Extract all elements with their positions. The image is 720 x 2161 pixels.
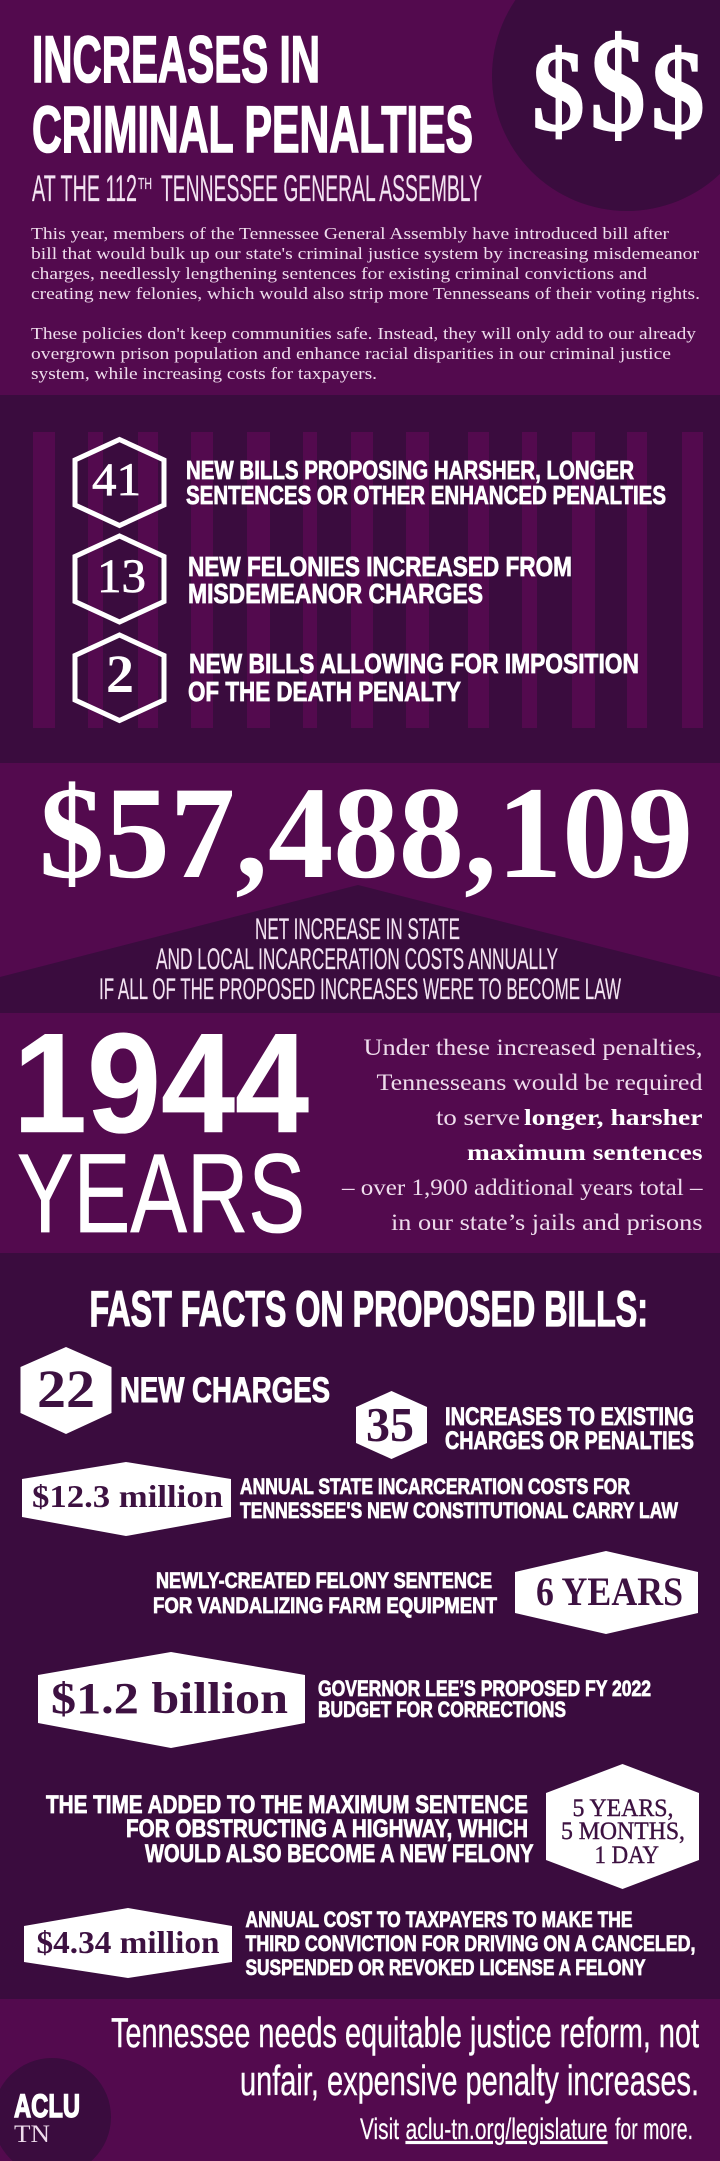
fact: 6 years xyxy=(153,1551,698,1634)
panel: footer xyxy=(0,2009,699,2161)
explanation text: Tennesseans would be required xyxy=(376,1070,703,1095)
logo: ACLU TN: ACLU xyxy=(14,2088,80,2124)
panel: header xyxy=(31,0,720,383)
title: CRIMINAL PENALTIES xyxy=(32,92,473,166)
fact: 5 years, 5 months, 1 day: THE TIME ADDED TO THE MAXIMUM SENTENCE xyxy=(46,1791,528,1819)
fact: $12.3 million: $12.3 million xyxy=(32,1478,223,1514)
cost caption: NET INCREASE IN STATE xyxy=(255,913,460,946)
stat: 13 new felonies: MISDEMEANOR CHARGES xyxy=(188,578,483,609)
intro paragraph 2: system, while increasing costs for taxpayers. xyxy=(31,364,377,383)
explanation text: Under these increased penalties, xyxy=(364,1035,702,1060)
explanation text: longer, harsher xyxy=(524,1105,702,1130)
subtitle xyxy=(32,168,482,209)
intro paragraph 1: bill that would bulk up our state's criminal justice system by increasing misdemeanor xyxy=(31,244,699,263)
stat: 13 new felonies: NEW FELONIES INCREASED FROM xyxy=(188,551,572,582)
stat: 41 new bills: 41 xyxy=(92,454,141,506)
intro paragraph 1: creating new felonies, which would also strip more Tennesseans of their voting rights. xyxy=(31,284,700,303)
fact: 22 new charges xyxy=(20,1347,330,1434)
logo: ACLU TN: TN xyxy=(14,2121,50,2148)
intro paragraph 1 xyxy=(31,224,700,303)
stat: 2 death penalty bills: 2 xyxy=(106,644,134,704)
intro paragraph 2 xyxy=(31,324,697,383)
closing statement xyxy=(111,2009,699,2104)
fact: $4.34 million: ANNUAL COST TO TAXPAYERS TO MAKE THE xyxy=(246,1907,632,1932)
panel: bill counts xyxy=(0,395,720,763)
fact: 22 new charges: NEW CHARGES xyxy=(120,1371,330,1410)
fact: 6 years: 6 YEARS xyxy=(536,1569,683,1614)
dark circle behind dollar signs xyxy=(492,0,720,211)
fact: 22 new charges: 22 xyxy=(37,1359,95,1419)
subtitle: AT THE 112 xyxy=(32,168,137,209)
explanation text: – over 1,900 additional years total – xyxy=(341,1175,703,1200)
title: INCREASES IN xyxy=(32,22,320,96)
panel: 1944 years xyxy=(13,1004,703,1256)
fact: 5 years, 5 months, 1 day: WOULD ALSO BECOME A NEW FELONY xyxy=(145,1840,534,1868)
fact: $1.2 billion: $1.2 billion xyxy=(51,1674,288,1723)
intro paragraph 1: charges, needlessly lengthening sentences for existing criminal convictions and xyxy=(31,264,648,283)
explanation text xyxy=(341,1035,703,1235)
fact: $12.3 million: ANNUAL STATE INCARCERATION COSTS FOR xyxy=(240,1474,630,1499)
explanation text: to serve xyxy=(436,1105,520,1130)
dark roof shape xyxy=(0,885,720,1013)
intro paragraph 2: overgrown prison population and enhance racial disparities in our criminal justice xyxy=(31,344,671,363)
big number: $57,488,109 xyxy=(39,759,693,906)
stat: 41 new bills xyxy=(75,440,666,526)
icon: dollar signs: $ xyxy=(532,27,585,156)
explanation text: maximum sentences xyxy=(467,1140,703,1165)
fact: $12.3 million xyxy=(22,1462,678,1536)
big figure xyxy=(13,1004,309,1256)
call to action: aclu-tn.org/legislature xyxy=(406,2113,608,2146)
panel: net cost xyxy=(0,759,720,1013)
fact: 6 years: FOR VANDALIZING FARM EQUIPMENT xyxy=(153,1593,497,1618)
cost caption xyxy=(99,913,621,1006)
big figure: 1944 xyxy=(13,1004,309,1163)
fact: $4.34 million: $4.34 million xyxy=(36,1924,220,1960)
fact: 6 years: NEWLY-CREATED FELONY SENTENCE xyxy=(156,1568,492,1593)
fact: $4.34 million xyxy=(24,1907,696,1980)
icon: dollar signs xyxy=(532,10,705,160)
panel: fast facts xyxy=(0,1253,720,1999)
intro paragraph 1: This year, members of the Tennessee General Assembly have introduced bill after xyxy=(31,224,669,243)
stat: 2 death penalty bills: OF THE DEATH PENALTY xyxy=(188,676,461,707)
subtitle: TH xyxy=(138,176,152,193)
fact: 5 years, 5 months, 1 day: 1 DAY xyxy=(594,1842,659,1869)
fact: 5 years, 5 months, 1 day: FOR OBSTRUCTING A HIGHWAY, WHICH xyxy=(126,1815,528,1843)
big figure: YEARS xyxy=(17,1131,305,1256)
icon: dollar signs: $ xyxy=(590,10,646,160)
fact: 5 years, 5 months, 1 day: 5 MONTHS, xyxy=(561,1818,685,1845)
stat: 2 death penalty bills xyxy=(75,635,639,720)
title xyxy=(32,22,473,166)
fact: 5 years, 5 months, 1 day: 5 YEARS, xyxy=(572,1795,674,1822)
intro paragraph 2: These policies don't keep communities safe. Instead, they will only add to our already xyxy=(31,324,697,343)
fact: $1.2 billion xyxy=(38,1652,651,1748)
fact: 35 increases: 35 xyxy=(366,1397,414,1452)
fact: 5 years, 5 months, 1 day xyxy=(46,1764,699,1889)
stat: 13 new felonies xyxy=(75,536,572,622)
fact: 35 increases xyxy=(356,1391,694,1459)
call to action: Visit xyxy=(360,2113,399,2146)
fact: $1.2 billion: BUDGET FOR CORRECTIONS xyxy=(318,1697,566,1722)
logo: ACLU TN xyxy=(0,2058,111,2161)
stat: 13 new felonies: 13 xyxy=(97,550,146,603)
explanation text: in our state’s jails and prisons xyxy=(391,1210,703,1235)
icon: dollar signs: $ xyxy=(651,27,705,156)
